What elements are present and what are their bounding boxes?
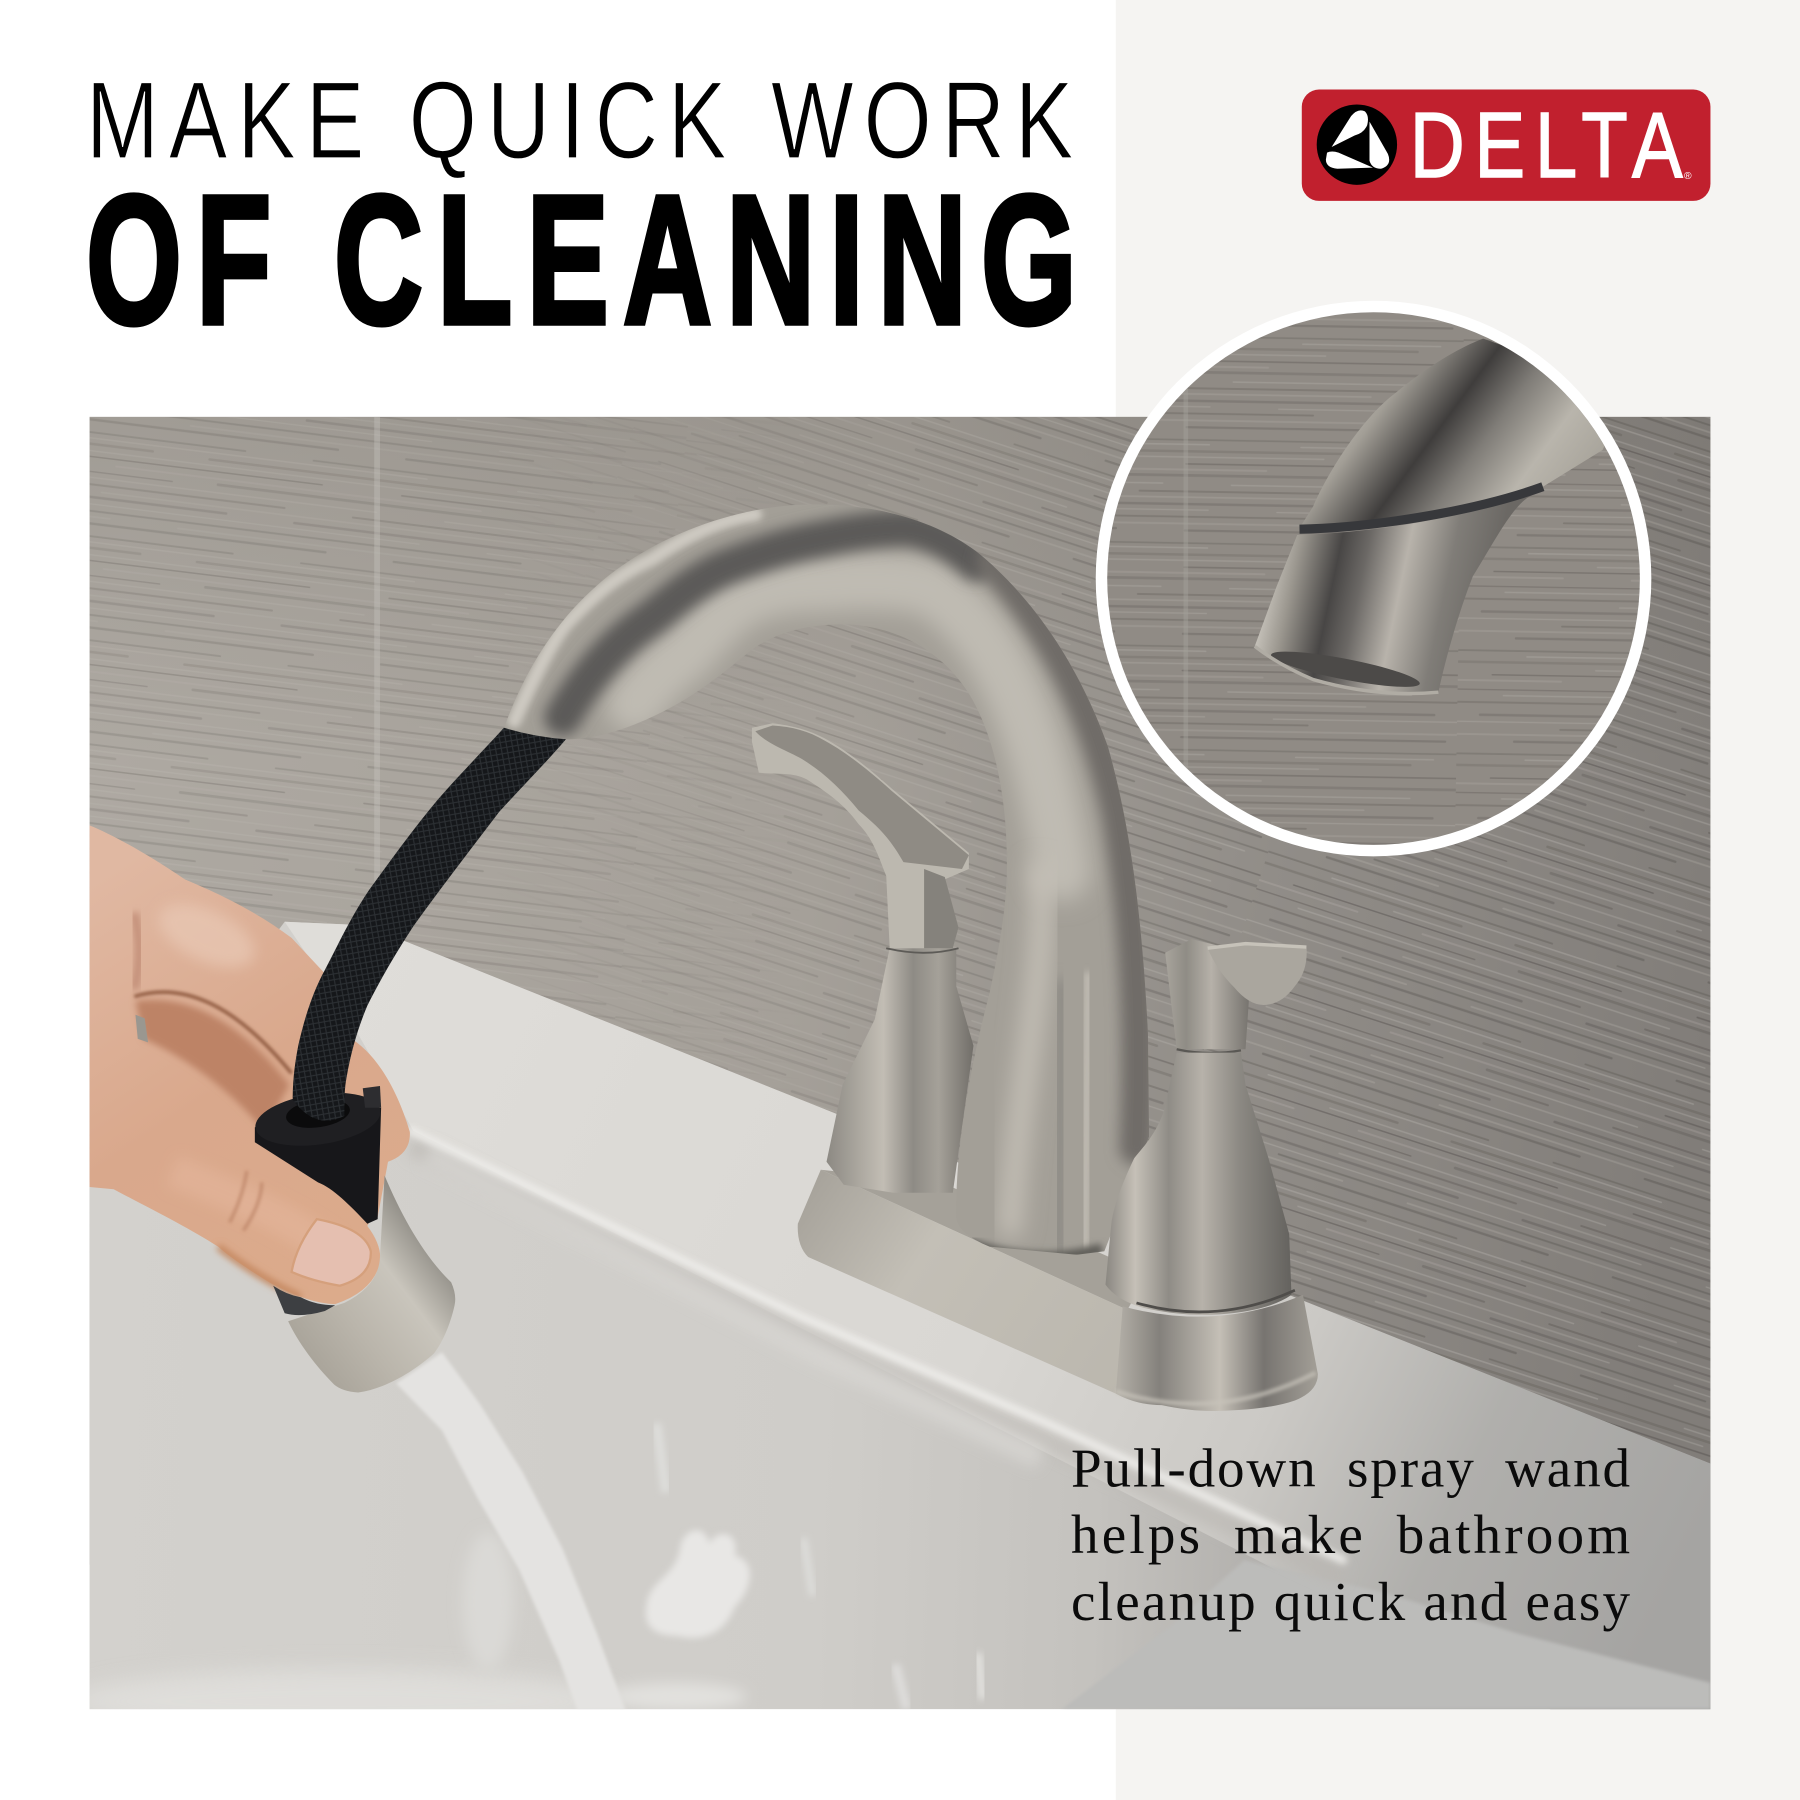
thumbnail — [292, 1219, 371, 1286]
basin — [90, 922, 1710, 1709]
inset white ring — [1096, 301, 1651, 856]
finger crease shadow — [135, 1000, 289, 1131]
right handle collar line — [1177, 1049, 1241, 1053]
right handle neck — [1165, 939, 1249, 1049]
caption line one: Pull-down spray wand — [1071, 1438, 1630, 1499]
right handle paddle — [1208, 945, 1307, 1005]
logo wordmark: DELTA — [1410, 94, 1683, 198]
upper section — [1299, 339, 1630, 528]
logo emblem — [1317, 104, 1397, 185]
tile wall — [90, 417, 1710, 1565]
sink deck — [285, 922, 1710, 1791]
left lever — [752, 723, 969, 948]
background: white left column — [0, 0, 1116, 1800]
inset spout — [1255, 339, 1630, 694]
right handle body — [1105, 1053, 1291, 1315]
foam at drain — [69, 1423, 983, 1733]
detail inset circle — [1096, 301, 1653, 861]
knuckle highlight — [149, 891, 264, 980]
faucet base plate — [798, 1170, 1318, 1411]
title line one: MAKE QUICK WORK — [86, 60, 1073, 181]
left handle body — [827, 948, 973, 1193]
wand black collar — [255, 1108, 381, 1224]
inset wall — [1102, 310, 1653, 861]
title line two: OF CLEANING — [86, 157, 1077, 363]
wand dark seal — [273, 1286, 335, 1315]
inset aerator — [1255, 645, 1438, 694]
spout brush shading — [635, 581, 1062, 872]
faucet spout — [504, 504, 1149, 1257]
logo red badge — [1302, 90, 1710, 201]
right handle — [1105, 939, 1307, 1315]
hand — [90, 825, 410, 1304]
title — [86, 60, 1077, 363]
main photo panel — [69, 417, 1710, 1791]
left handle — [752, 723, 973, 1193]
caption — [1071, 1438, 1631, 1632]
braided hose — [293, 728, 566, 1121]
back finger and palm — [90, 825, 410, 1304]
plate front face — [798, 1170, 1131, 1394]
caption line three: cleanup quick and easy — [1071, 1571, 1631, 1632]
Delta logo — [1302, 90, 1710, 201]
plate top surface — [821, 1170, 1148, 1310]
registered mark: ® — [1684, 171, 1692, 182]
lever top surface — [755, 726, 969, 869]
towel — [1062, 1560, 1710, 1709]
inset dark seal — [1299, 487, 1543, 529]
water stream — [396, 1352, 626, 1710]
wedding ring — [135, 1015, 148, 1042]
thumb creases — [230, 1171, 262, 1231]
round pedestal — [1116, 1295, 1318, 1411]
background: off-white right column — [1116, 0, 1800, 1800]
wand metal body — [288, 1176, 455, 1392]
basin corner line — [374, 1401, 379, 1607]
spray wand — [252, 1085, 455, 1392]
lower section — [1255, 491, 1538, 694]
sink rim highlight — [411, 1131, 1343, 1577]
caption line two: helps make bathroom — [1071, 1504, 1630, 1565]
